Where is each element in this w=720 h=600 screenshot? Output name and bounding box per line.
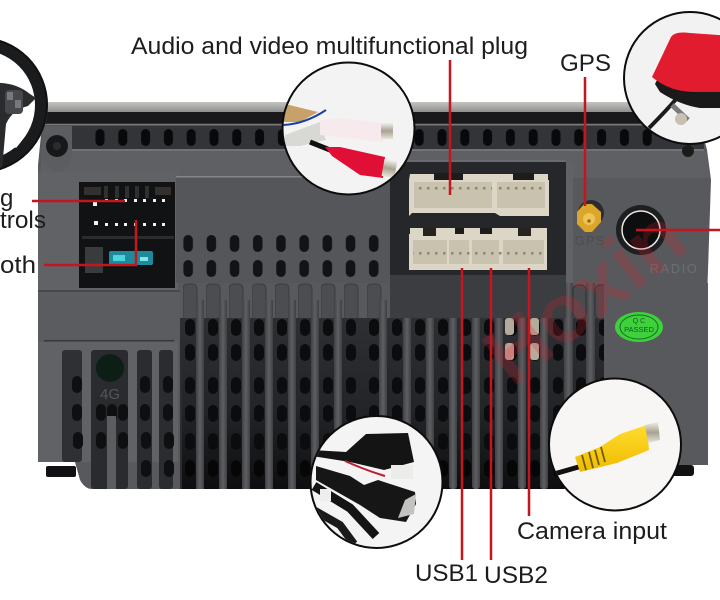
radio antenna socket: RADIO xyxy=(650,261,698,276)
label: GPS: GPS xyxy=(560,50,611,77)
vent ribs xyxy=(196,283,595,489)
blue fuse xyxy=(109,251,153,265)
label: steering controls fragment one: g xyxy=(0,185,13,212)
left vent panel xyxy=(38,290,182,489)
callout: GPS antenna xyxy=(624,12,720,144)
QC passed sticker: PASSED xyxy=(624,325,655,334)
callout: camera RCA plug xyxy=(549,378,681,510)
radio antenna socket xyxy=(616,205,698,276)
red leader lines xyxy=(32,60,720,560)
callout: steering wheel xyxy=(0,37,48,173)
left side panel tone xyxy=(38,172,178,462)
left vent panel: 4G xyxy=(100,386,120,403)
upper grey band xyxy=(40,151,710,178)
watermark: Hoxin xyxy=(467,190,703,402)
multi-plug socket block xyxy=(390,160,573,318)
rear feet xyxy=(640,465,694,476)
callout: audio video RCA plugs xyxy=(282,62,414,194)
GPS gold connector: GPS xyxy=(575,233,605,248)
GPS cable tail xyxy=(682,145,694,157)
central vent panel xyxy=(180,283,612,489)
label: USB1: USB1 xyxy=(415,560,478,587)
top metal strip xyxy=(46,102,696,113)
upper vent holes xyxy=(180,234,382,280)
mounting screw xyxy=(41,126,72,172)
GPS gold connector xyxy=(575,200,605,248)
upper connectors xyxy=(409,173,549,216)
QC passed sticker xyxy=(615,312,663,342)
head unit rear panel xyxy=(38,102,711,489)
upper slots row xyxy=(183,283,387,318)
label: bluetooth fragment: oth xyxy=(0,252,36,279)
label: USB2: USB2 xyxy=(484,562,548,589)
right side slots xyxy=(573,283,708,465)
top vent strip xyxy=(44,123,704,151)
callout: USB cables xyxy=(310,416,442,548)
label: steering controls fragment two: trols xyxy=(0,207,46,234)
label: audio and video plug: Audio and video multifunctional plug xyxy=(131,33,528,60)
light reflections in vent xyxy=(505,318,539,360)
label: camera input: Camera input xyxy=(517,518,667,545)
lower connectors xyxy=(409,228,547,270)
steering / bluetooth connector socket xyxy=(79,182,175,288)
QC passed sticker: Q C xyxy=(633,318,645,325)
